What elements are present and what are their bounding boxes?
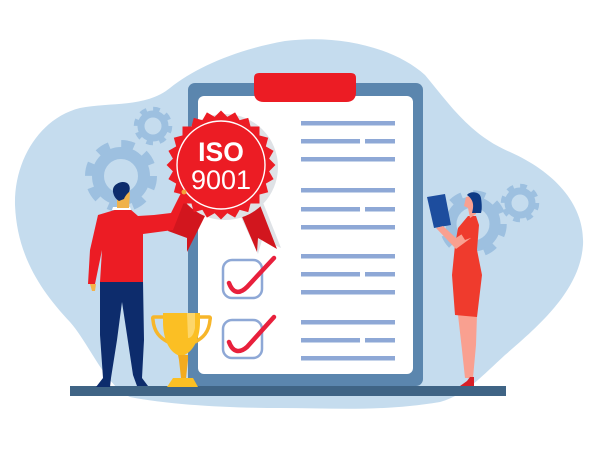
gear: right small — [503, 186, 537, 220]
clipboard clip — [254, 73, 356, 102]
shelf — [70, 386, 506, 396]
checkbox 1 — [223, 258, 274, 298]
man's trousers — [96, 281, 148, 387]
clipboard — [188, 73, 423, 386]
badge text: ISO — [198, 137, 244, 167]
gear: right large — [443, 194, 503, 254]
man's head — [117, 192, 130, 208]
gear: left large — [89, 144, 153, 208]
man's jacket — [88, 193, 186, 284]
ISO 9001 badge — [167, 111, 275, 219]
badge shadow — [172, 114, 278, 220]
trophy — [153, 313, 210, 387]
woman's head — [464, 195, 476, 218]
woman's shoe — [460, 377, 474, 386]
checklist text lines — [301, 121, 395, 360]
ribbon tails — [168, 198, 277, 252]
gear: left small — [136, 109, 170, 143]
woman — [427, 192, 482, 386]
man's hand — [90, 284, 96, 291]
woman's arm — [436, 226, 471, 249]
checkbox 2 — [223, 317, 274, 358]
ISO 9001 badge: 9001 — [191, 165, 251, 195]
woman's legs — [458, 315, 477, 378]
ribbon shadow — [240, 200, 281, 254]
woman's hair — [467, 192, 482, 213]
man's collar — [112, 207, 131, 210]
man — [88, 182, 186, 387]
woman's book — [427, 194, 451, 228]
background blob — [15, 39, 583, 409]
woman's dress — [452, 216, 482, 317]
